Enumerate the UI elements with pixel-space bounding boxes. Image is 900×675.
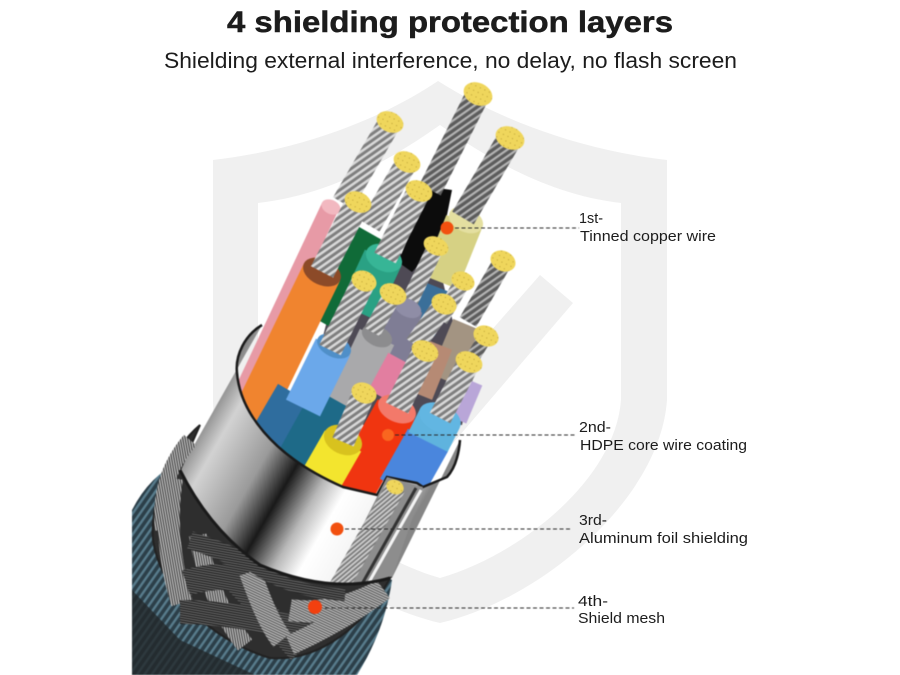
label: 1st layer: [579, 210, 716, 245]
label: 2nd layer: 2nd-: [579, 419, 611, 436]
wire: peach: [415, 289, 460, 395]
wire: small centre: [440, 268, 478, 320]
label: 4th layer: 4th-: [578, 593, 608, 610]
wire: right small: [470, 321, 502, 362]
drain wire: [330, 477, 423, 592]
wire: tall centre: [430, 78, 496, 190]
wire: teal: [358, 176, 436, 312]
label: 3rd layer: Aluminum foil shielding: [579, 530, 748, 547]
outer jacket: [132, 462, 392, 675]
label: 3rd layer: [579, 512, 748, 547]
wire: dark green: [318, 147, 424, 320]
black core gap: [398, 187, 452, 272]
label: 1st layer: Tinned copper wire: [580, 228, 716, 245]
wire: grey: [340, 279, 410, 415]
wire: purple grey: [385, 294, 424, 380]
wire: light blue: [303, 266, 380, 408]
wire: pink: [243, 107, 407, 392]
wire: dark blue: [262, 395, 332, 470]
leader: HDPE core wire coating: [382, 429, 576, 441]
jacket lower shade: [132, 590, 255, 675]
label: 2nd layer: [579, 419, 747, 454]
wire: pink small: [378, 358, 398, 395]
aluminum foil cylinder: [180, 325, 460, 584]
wire: tan: [445, 246, 519, 380]
core backing: [300, 245, 475, 425]
title: 4 shielding protection layers: [227, 6, 673, 39]
label: 2nd layer: HDPE core wire coating: [580, 437, 747, 454]
wire: red: [350, 336, 442, 495]
wire: sky blue: [400, 347, 486, 490]
wire: steel blue: [407, 232, 452, 330]
leader: shield mesh: [308, 600, 574, 614]
wire: khaki: [440, 122, 528, 282]
label: 4th layer: [578, 593, 665, 627]
shield mesh braid: [153, 425, 390, 658]
wire: purple: [458, 382, 474, 420]
leader: tinned copper wire: [440, 222, 579, 234]
leader: aluminum foil shielding: [330, 522, 572, 536]
label: 4th layer: Shield mesh: [578, 610, 665, 627]
label: 3rd layer: 3rd-: [579, 512, 607, 529]
cable illustration: [132, 78, 579, 675]
wire: orange: [248, 187, 375, 425]
subtitle: Shielding external interference, no delay, no flash screen: [164, 48, 737, 73]
label: 1st layer: 1st-: [579, 210, 603, 227]
shield watermark: [213, 81, 667, 623]
wire: yellow: [312, 378, 380, 495]
